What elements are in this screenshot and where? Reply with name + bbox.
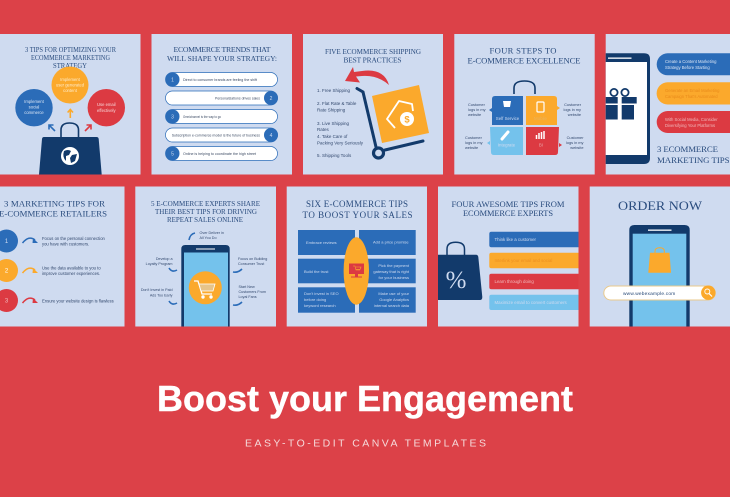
tip text: Build the trust — [304, 269, 329, 274]
tip text: Add a price promise — [373, 240, 409, 244]
callouts and arrows: Focus on Building — [238, 257, 267, 261]
callouts and arrows: Customers From — [238, 290, 266, 294]
panel: shipping best practices — [303, 34, 443, 174]
tile: bi: BI — [539, 142, 543, 148]
callouts and arrows: Consumer Trust — [238, 262, 264, 266]
subtitle: EASY-TO-EDIT CANVA TEMPLATES — [245, 438, 486, 450]
callouts and arrows: Don't Invest in Paid — [141, 288, 172, 292]
tile: bi — [526, 127, 562, 155]
trend row 1: Direct to consumer brands are feeling the shift — [183, 78, 258, 82]
callouts and arrows — [141, 231, 267, 299]
tile: self service — [489, 96, 523, 125]
callouts: logs in my — [465, 140, 483, 145]
heading: retailers: E-COMMERCE RETAILERS — [0, 208, 107, 218]
orange circle tip: user generated — [56, 82, 85, 88]
icon: phone with gift — [606, 53, 650, 164]
trend row 5 — [166, 146, 278, 160]
tip text: gateway that is right — [373, 269, 410, 274]
tip pill: content: Create a Content Marketing — [665, 59, 717, 64]
shipping list: 1. Free Shipping — [317, 88, 351, 93]
heading: order now: ORDER NOW — [618, 198, 703, 213]
heading: experts: THEIR BEST TIPS FOR DRIVING — [155, 207, 258, 216]
trend row 4 — [166, 128, 278, 142]
tip 2: Use the data available to you to — [42, 266, 101, 270]
heading: four steps: FOUR STEPS TO — [490, 46, 556, 56]
tip blocks — [298, 230, 416, 313]
tip bar 2: Interlink your email and social — [494, 258, 552, 263]
tip 3 — [0, 289, 114, 312]
heading: retailers — [0, 198, 107, 218]
tip text: internal search data — [374, 303, 410, 308]
orange circle tip: Implement — [60, 77, 81, 82]
callouts: logs in my — [468, 107, 486, 112]
heading: four awesome — [452, 200, 565, 218]
callouts: Customer — [567, 135, 584, 140]
trend row 2: Personalizations drives sales — [215, 96, 260, 100]
callouts: website — [465, 145, 478, 150]
icon: shopping bag with globe — [39, 123, 102, 174]
tip 3: Ensure your website design is flawless — [42, 298, 114, 304]
callouts: website — [570, 145, 584, 150]
blue circle tip: social — [29, 104, 39, 110]
callouts: logs in my — [563, 107, 581, 112]
orange circle tip — [52, 66, 88, 104]
heading: trends: ECOMMERCE TRENDS THAT — [174, 45, 271, 54]
callouts and arrows: Start New — [238, 285, 255, 289]
orange circle tip: content — [63, 88, 78, 93]
tip pill: email — [657, 82, 730, 104]
icon: orange bag — [648, 248, 671, 273]
tip bar 2 — [489, 253, 578, 268]
icon: price tag box: $ — [404, 114, 410, 125]
heading: 3 ecommerce marketing tips — [657, 144, 730, 165]
tip 2: improve customer experiences. — [42, 271, 100, 276]
heading: retailers: 3 MARKETING TIPS FOR — [4, 198, 105, 208]
shipping list: 5. Shipping Tools — [317, 153, 352, 158]
callouts: logs in my — [566, 140, 584, 145]
panel: four steps — [454, 34, 595, 174]
panel: six tips — [287, 186, 427, 326]
callouts and arrows: All You Do — [200, 236, 217, 240]
heading: four awesome: FOUR AWESOME TIPS FROM — [452, 200, 565, 209]
tip text: Google Analytics — [379, 297, 409, 302]
shipping list: 4. Take Care of — [317, 134, 348, 139]
tile: mobile — [526, 96, 560, 125]
icon: percent bag: % — [446, 267, 466, 294]
tip text: for your business — [379, 275, 409, 280]
tile: self service: Self Service — [496, 116, 520, 121]
trend row 2 — [166, 91, 278, 105]
tip pill: social: With Social Media, Consider — [665, 117, 718, 122]
panel: 5 experts share — [135, 186, 276, 326]
trend row 3 — [166, 110, 278, 124]
trend row 4: 4 — [270, 133, 273, 139]
tip 1: you have with customers. — [42, 242, 89, 246]
handle of bag — [514, 81, 535, 94]
tip text — [304, 240, 410, 308]
search bar — [604, 286, 716, 300]
heading: 3 tips — [25, 45, 117, 70]
tip 1 — [0, 230, 106, 252]
tip text: before doing — [304, 297, 326, 302]
heading: experts: 5 E-COMMERCE EXPERTS SHARE — [151, 199, 260, 208]
tip text: keyword research — [304, 303, 336, 308]
heading: 3 tips: ECOMMERCE MARKETING — [31, 53, 110, 62]
trend row 5: 5 — [171, 151, 174, 157]
tip pill: content — [657, 53, 730, 75]
tip text: Make use of your — [378, 291, 410, 296]
heading: trends — [167, 45, 277, 63]
callouts and arrows: Develop a — [156, 257, 173, 261]
tip bar 3: Learn through doing — [494, 279, 534, 284]
trend row 2: 2 — [270, 96, 273, 102]
tile: integrate: Integrate — [498, 142, 516, 148]
tip bar 4: Maximize email to convert customers — [494, 300, 568, 305]
panel: 3 ecommerce marketing tips — [606, 34, 730, 174]
heading: 3 ecommerce marketing tips: MARKETING TIPS — [657, 155, 730, 165]
shipping list: 2. Flat Rate & Table — [317, 101, 357, 106]
panel: 3 marketing tips for retailers — [0, 186, 124, 326]
main title: Boost your Engagement — [157, 378, 573, 419]
tip text: Don't invest in SEO — [304, 291, 339, 296]
tip pill: content: Strategy Before Starting — [665, 65, 710, 70]
trend row 1 — [166, 72, 278, 86]
heading: shipping: BEST PRACTICES — [344, 56, 402, 64]
tile: integrate — [487, 127, 523, 155]
heading: six tips: SIX E-COMMERCE TIPS — [306, 199, 408, 209]
tip text: Pick the payment — [378, 263, 410, 268]
arrows — [49, 110, 91, 131]
blue circle tip: Implement — [24, 99, 45, 104]
tip bar 1 — [489, 232, 578, 247]
trend row 3: Omnichannel is the way to go — [183, 115, 221, 119]
shipping list: Packing Very Seriously — [317, 140, 364, 146]
heading: six tips — [302, 199, 412, 220]
tip pill: email: Generate an Email Marketing — [665, 88, 720, 93]
callouts and arrows: Over Deliver in — [200, 231, 224, 235]
tile: mobile: Mobile — [534, 116, 548, 121]
tip text: Embrace reviews — [306, 240, 337, 245]
callouts — [465, 102, 584, 150]
shipping list: Rates — [317, 127, 330, 132]
tip 1: 1 — [5, 239, 9, 245]
panel: order now — [590, 186, 730, 326]
callouts: Customer — [468, 102, 486, 107]
panel: 3 tips for optimizing strategy — [0, 34, 140, 174]
trend row 4: Subscription e-commerce model is the future of business — [172, 134, 260, 138]
callouts and arrows: Loyalty Program — [146, 262, 172, 266]
icon: phone — [629, 225, 690, 326]
tip bar 3 — [489, 274, 578, 289]
icon: phone with cart — [181, 245, 230, 326]
tip bar 4 — [489, 295, 578, 310]
heading: 3 tips: STRATEGY — [53, 61, 87, 70]
tip pill: social — [657, 111, 730, 133]
trend row 3: 3 — [171, 114, 174, 120]
trend row 5: Online is helping to coordinate the high street — [183, 152, 257, 156]
shipping list: 3. Live Shipping — [317, 121, 350, 126]
callouts: Customer — [564, 102, 582, 107]
tip pill: social: Diversifying Your Platforms — [665, 123, 715, 128]
blue circle tip — [15, 89, 53, 126]
callouts: Customer — [465, 135, 483, 140]
red circle tip — [88, 89, 125, 126]
icon: ellipse with monitor — [344, 237, 369, 305]
heading: four steps — [468, 46, 580, 66]
callouts and arrows: Ads Too Early — [150, 294, 173, 298]
panel: four awesome tips — [438, 186, 578, 326]
red circle tip: Use email — [97, 102, 116, 107]
panel: ecommerce trends — [152, 34, 292, 174]
heading: experts — [151, 199, 260, 224]
heading: shipping — [325, 47, 422, 64]
shipping list — [317, 88, 364, 158]
callouts and arrows: Loyal Fans — [238, 295, 257, 299]
heading: shipping: FIVE ECOMMERCE SHIPPING — [325, 47, 422, 56]
tip 2 — [0, 259, 101, 282]
heading: four steps: E-COMMERCE EXCELLENCE — [468, 56, 580, 66]
shipping list: Rate Shipping — [317, 108, 346, 112]
heading: four awesome: ECOMMERCE EXPERTS — [463, 209, 553, 218]
callouts: website — [468, 112, 481, 117]
heading: trends: WILL SHAPE YOUR STRATEGY: — [167, 54, 277, 63]
tip 1: Focus on the personal connection — [42, 236, 106, 241]
callouts: website — [568, 112, 581, 117]
trend row 1: 1 — [171, 77, 174, 83]
icon: hand truck — [357, 88, 423, 158]
blue circle tip: commerce — [24, 110, 44, 115]
arrow: red curved — [345, 67, 389, 85]
icon: price tag box — [372, 85, 429, 143]
red circle tip: effectively — [97, 108, 116, 113]
search bar: www.webexample.com — [623, 291, 675, 297]
heading: 3 ecommerce marketing tips: 3 ECOMMERCE — [657, 144, 718, 154]
tip 2: 2 — [5, 268, 9, 274]
tip pill: email: Campaign That's Automated — [665, 94, 718, 99]
icon: percent bag — [438, 242, 482, 300]
heading: experts: REPEAT SALES ONLINE — [167, 215, 243, 224]
tip bar 1: Think like a customer — [494, 237, 537, 242]
tip 3: 3 — [5, 298, 9, 304]
heading: 3 tips: 3 TIPS FOR OPTIMIZING YOUR — [25, 45, 117, 54]
heading: six tips: TO BOOST YOUR SALES — [302, 210, 412, 220]
